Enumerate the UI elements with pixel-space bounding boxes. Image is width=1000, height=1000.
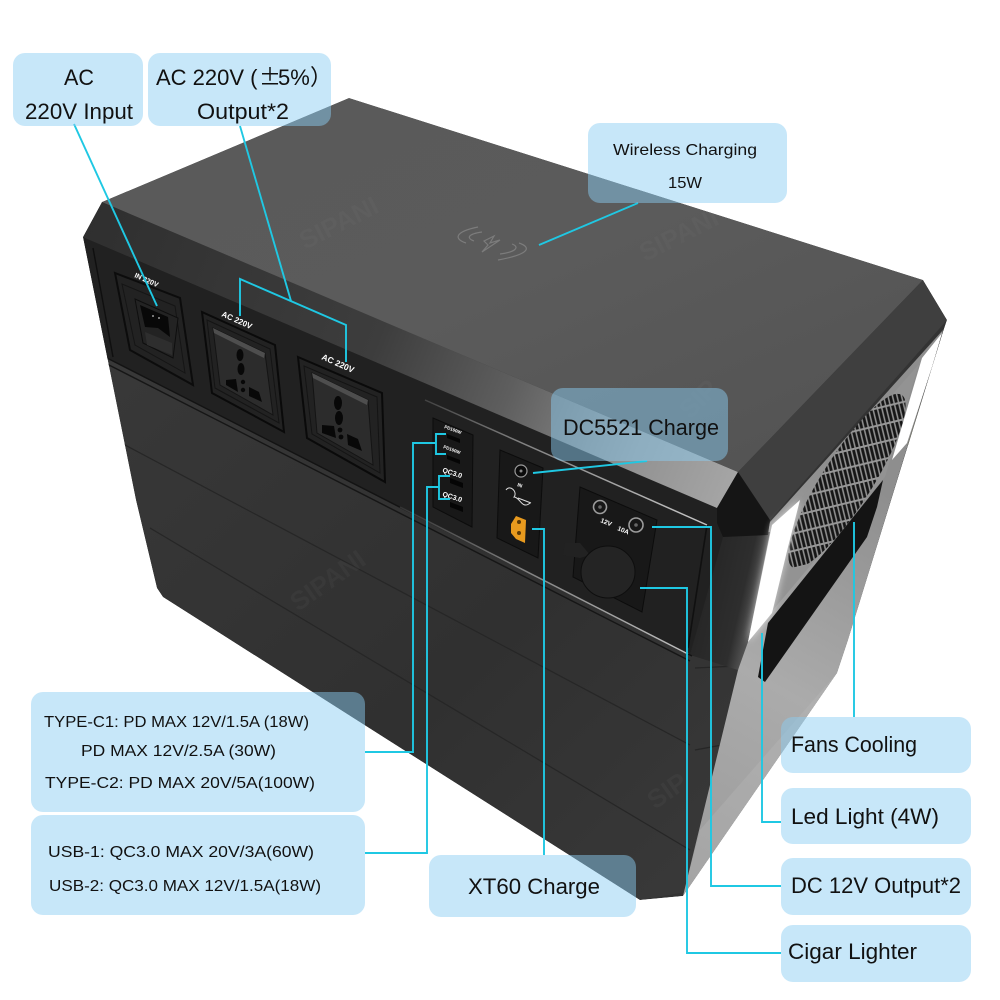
label: AC 220V input: 220V Input bbox=[25, 99, 133, 124]
LED light right bbox=[892, 333, 942, 460]
watermarks bbox=[74, 122, 638, 542]
watermarks: SIPANI bbox=[284, 544, 371, 617]
icon: wireless charging bbox=[458, 227, 526, 260]
panel: AC output socket 2 bbox=[298, 352, 385, 482]
product: portable power station bbox=[83, 98, 947, 900]
label: DC 12V output bbox=[781, 858, 971, 915]
panel: USB ports: PD100W bbox=[444, 424, 463, 435]
panel: AC output socket 1 bbox=[202, 310, 284, 432]
watermarks: SIP bbox=[673, 373, 724, 424]
label: cigar lighter bbox=[781, 925, 971, 982]
bracket: Type-C ports bbox=[436, 434, 446, 454]
LED glow bbox=[748, 500, 800, 642]
fan plate bbox=[774, 562, 809, 609]
LED light left bbox=[748, 500, 800, 642]
label: DC 12V output: DC 12V Output*2 bbox=[791, 873, 961, 898]
panel: DC input and XT60 bbox=[497, 450, 543, 558]
label: USB specs: USB-1: QC3.0 MAX 20V/3A(60W) bbox=[48, 844, 314, 861]
label: AC 220V output: ± bbox=[259, 60, 281, 92]
leader line: wireless charging bbox=[539, 203, 638, 245]
front bevel strip bbox=[83, 202, 738, 508]
bracket: AC output sockets bbox=[240, 279, 346, 362]
label: DC5521 charge bbox=[551, 388, 728, 461]
label: Type-C specs: TYPE-C2: PD MAX 20V/5A(100W) bbox=[45, 775, 315, 792]
leader line: XT60 bbox=[532, 529, 544, 855]
label: cigar lighter: Cigar Lighter bbox=[788, 939, 917, 964]
panel: 12V outputs and cigar lighter bbox=[563, 487, 657, 612]
lower front face bbox=[83, 238, 642, 900]
watermarks: SIPANI bbox=[634, 202, 723, 267]
panel: AC input socket bbox=[115, 272, 193, 385]
label: Type-C specs: TYPE-C1: PD MAX 12V/1.5A (18W) bbox=[44, 714, 309, 731]
label: AC 220V output: 5% bbox=[278, 65, 310, 90]
label: fans cooling: Fans Cooling bbox=[791, 732, 917, 757]
corner facet bbox=[717, 472, 770, 537]
panel: AC input socket: IN 220V bbox=[133, 272, 159, 289]
panel: AC output socket 1: AC 220V bbox=[220, 310, 254, 331]
label: Type-C specs: PD MAX 12V/2.5A (30W) bbox=[81, 743, 276, 760]
leader line: AC output bbox=[240, 126, 291, 301]
leader line: LED light bbox=[762, 633, 781, 822]
side face bbox=[683, 330, 943, 896]
lower front seams bbox=[110, 437, 737, 850]
label: AC 220V output: Output*2 bbox=[197, 99, 289, 124]
label: wireless charging bbox=[588, 123, 787, 203]
panel: USB ports: QC3.0 bbox=[441, 467, 463, 480]
label: AC 220V input: AC bbox=[64, 65, 94, 90]
carrying handle recess bbox=[758, 480, 883, 682]
watermarks: SIPANI bbox=[294, 190, 383, 255]
label: LED light: Led Light (4W) bbox=[791, 804, 939, 829]
panel: 12V outputs and cigar lighter: 10A bbox=[616, 525, 630, 536]
label: AC 220V input bbox=[13, 53, 143, 126]
panel: USB ports: PD100W bbox=[443, 444, 462, 455]
label: AC 220V output bbox=[148, 53, 332, 126]
top face bbox=[102, 98, 923, 472]
label: wireless charging: 15W bbox=[668, 175, 703, 192]
label: XT60 charge bbox=[429, 855, 636, 917]
watermarks: SIP bbox=[641, 766, 693, 815]
panel: USB ports bbox=[433, 418, 473, 527]
right top bevel bbox=[738, 280, 947, 520]
fan grille bbox=[788, 394, 906, 568]
label: DC5521 charge: DC5521 Charge bbox=[563, 415, 719, 440]
icon: lighter cap bbox=[574, 543, 588, 558]
panel upper trim line bbox=[425, 400, 707, 525]
icon: XT60 connector bbox=[511, 516, 526, 543]
label: AC 220V output: AC 220V ( bbox=[156, 65, 258, 90]
leader line: fans bbox=[853, 522, 855, 717]
leader line: DC5521 bbox=[533, 461, 647, 473]
label: USB specs bbox=[31, 815, 365, 915]
label: USB specs: USB-2: QC3.0 MAX 12V/1.5A(18W) bbox=[49, 878, 321, 895]
leader line: AC input bbox=[74, 124, 157, 306]
leader line: cigar lighter bbox=[640, 588, 781, 953]
leader line: DC 12V output bbox=[652, 527, 781, 886]
label: wireless charging: Wireless Charging bbox=[613, 142, 757, 159]
label: fans cooling bbox=[781, 717, 971, 773]
panel lower trim lines bbox=[107, 358, 692, 661]
leader line: USB ports bbox=[365, 487, 439, 853]
label: Type-C specs bbox=[31, 692, 365, 812]
label: AC 220V output: ） bbox=[310, 65, 332, 90]
panel: DC input and XT60: IN bbox=[516, 482, 523, 490]
label: XT60 charge: XT60 Charge bbox=[468, 874, 600, 899]
body silhouette bbox=[83, 98, 947, 900]
panel: USB ports: QC3.0 bbox=[441, 491, 463, 504]
leader line: Type-C ports bbox=[365, 443, 436, 752]
label: LED light bbox=[781, 788, 971, 844]
panel: AC output socket 2: AC 220V bbox=[320, 352, 356, 375]
panel: 12V outputs and cigar lighter: 12V bbox=[599, 517, 613, 528]
bracket: USB ports bbox=[439, 476, 450, 499]
right corner of the front face bbox=[690, 532, 770, 670]
black control panel bbox=[83, 237, 723, 655]
